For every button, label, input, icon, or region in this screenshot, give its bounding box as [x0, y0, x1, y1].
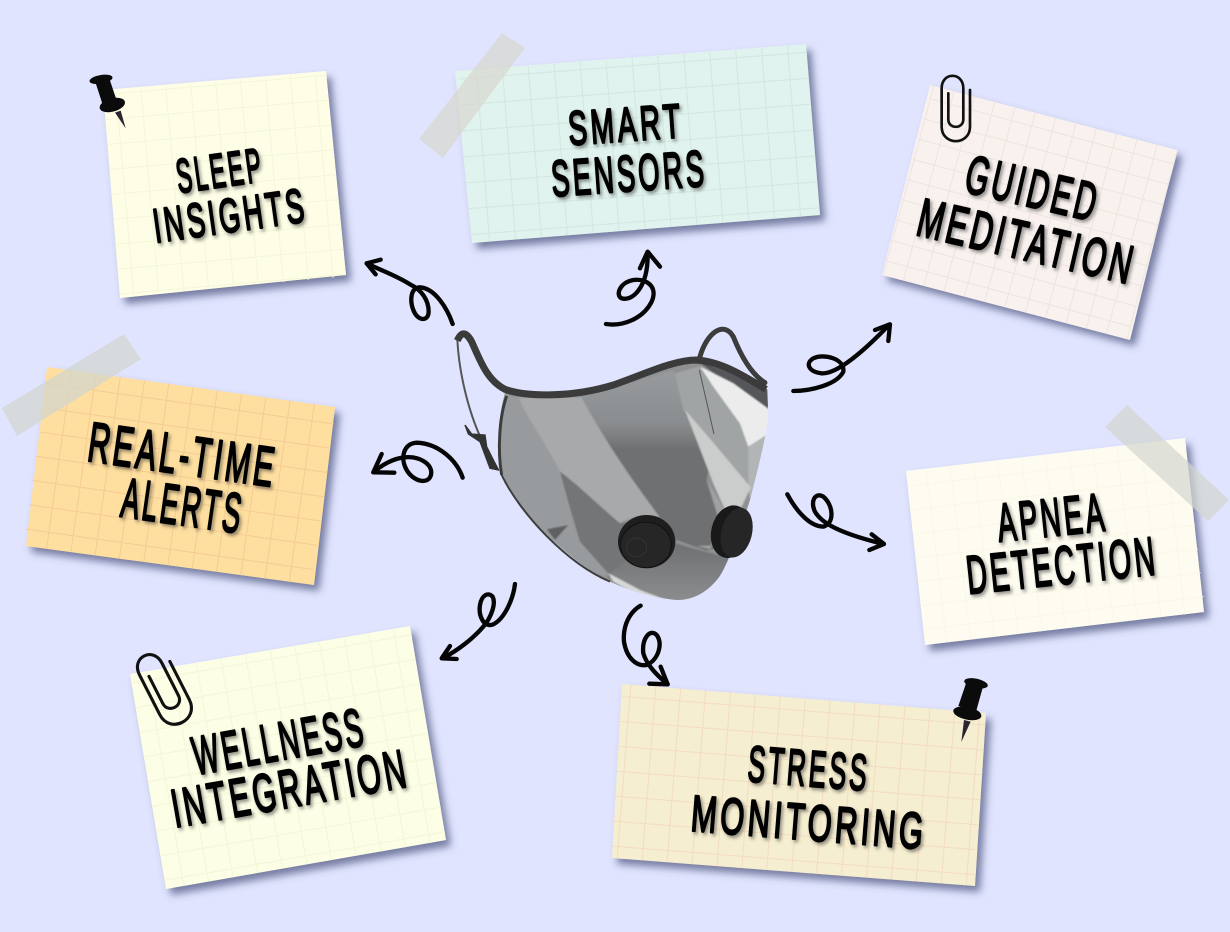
mask: bottom highlight	[608, 573, 667, 600]
note: Sleep Insights: INSIGHTS	[150, 179, 311, 254]
note: Real-Time Alerts: ALERTS	[118, 466, 248, 545]
note: Smart Sensors: SENSORS	[549, 140, 709, 207]
note: Guided Meditation: GUIDED	[960, 144, 1106, 234]
mask: centre panel	[600, 371, 718, 551]
note: Wellness Integration	[130, 626, 446, 889]
arrow: to Smart Sensors	[606, 252, 660, 324]
note: Stress Monitoring: MONITORING	[689, 785, 929, 860]
note: Real-Time Alerts	[24, 367, 336, 585]
note: Smart Sensors	[455, 44, 820, 243]
arrow: to Real-Time Alerts	[373, 443, 463, 481]
mask: left ear strap	[457, 340, 498, 470]
tape: Real-Time Alerts	[2, 334, 141, 436]
mask: right side edge	[701, 364, 768, 409]
note: Wellness Integration: INTEGRATION	[167, 739, 414, 839]
mask: light diagonal panel	[685, 410, 751, 513]
mask: nose seam	[699, 370, 714, 434]
mask: right lower panel	[748, 436, 765, 499]
arrow: to Sleep Insights	[367, 260, 453, 324]
mask: left side trim	[499, 396, 507, 475]
mask: side valve	[705, 501, 758, 562]
tape: Smart Sensors	[419, 33, 525, 158]
icon: push pin bottom right	[952, 676, 989, 742]
mask: front valve	[618, 515, 675, 568]
mask illustration	[457, 329, 773, 610]
mask: right ear loop	[700, 329, 765, 383]
mask: strap buckle	[465, 425, 498, 470]
mask: lower mid panel	[698, 483, 724, 550]
arrow: to Stress Monitoring	[624, 606, 668, 684]
mask: lower right panel	[607, 543, 729, 591]
mask: upper right panel	[675, 367, 748, 487]
note: Wellness Integration: WELLNESS	[188, 697, 371, 787]
mask: small dark fold	[547, 525, 568, 540]
note: Real-Time Alerts: REAL-TIME	[84, 410, 281, 499]
tape: Apnea Detection	[1105, 405, 1229, 521]
note: Stress Monitoring: STRESS	[746, 735, 872, 802]
mask: left light panel	[518, 397, 660, 523]
mask: bottom trim	[502, 475, 610, 582]
mask: lower triangle panel	[560, 472, 677, 575]
note: Smart Sensors: SMART	[566, 95, 686, 156]
icon: paper clip Wellness Integration	[133, 647, 197, 730]
arrow: to Apnea Detection	[787, 494, 884, 550]
mask: face shell	[500, 364, 768, 600]
icon: push pin top left	[89, 73, 127, 128]
arrow: to Guided Meditation	[793, 324, 890, 391]
note: Apnea Detection: APNEA	[994, 482, 1110, 554]
note: Sleep Insights: SLEEP	[173, 139, 267, 204]
note: Guided Meditation	[882, 84, 1178, 340]
note: Stress Monitoring	[610, 684, 986, 886]
mask: left medium panel	[497, 393, 610, 577]
note: Sleep Insights	[103, 71, 346, 298]
mask: white panel	[700, 367, 770, 447]
arrow: to Wellness Integration	[442, 584, 515, 659]
note: Apnea Detection	[906, 438, 1205, 645]
icon: paper clip Guided Meditation	[942, 76, 970, 141]
mask: top band	[457, 334, 766, 395]
